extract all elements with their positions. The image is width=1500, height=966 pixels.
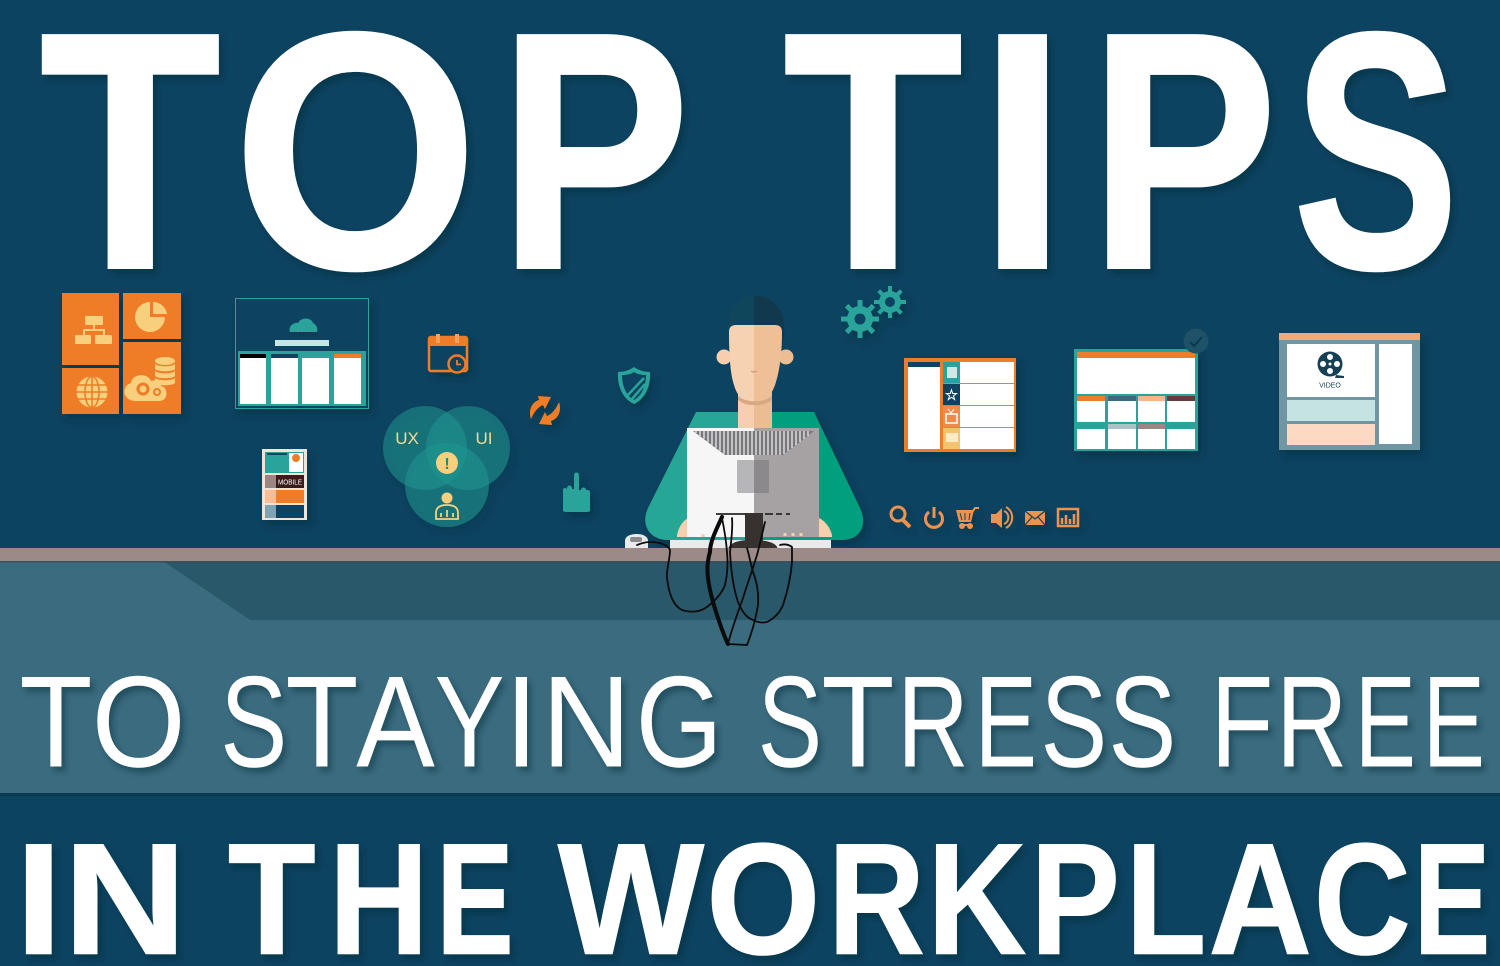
icon: refresh arrows	[530, 396, 560, 425]
venn diagram: !	[444, 456, 450, 473]
monitor back	[687, 428, 819, 537]
subtitle: to staying stress free: T	[821, 648, 894, 794]
panel: search page wireframe	[236, 298, 368, 408]
venn diagram: UX	[395, 429, 419, 448]
subtitle: to staying stress free: T	[285, 648, 358, 794]
subtitle: to staying stress free: A	[356, 648, 435, 794]
shirt	[645, 412, 863, 540]
subtitle: to staying stress free: G	[636, 648, 722, 794]
subtitle: to staying stress free: S	[220, 648, 287, 794]
lower band	[0, 561, 1500, 796]
panel: video page wireframe	[1279, 333, 1420, 450]
neck	[738, 385, 772, 429]
subtitle: to staying stress free: F	[1211, 648, 1273, 794]
hands	[677, 518, 832, 537]
icon: calendar	[429, 334, 467, 372]
keyboard	[670, 540, 831, 549]
stand	[716, 513, 790, 549]
subtitle: to staying stress free: S	[1108, 648, 1176, 794]
icon tile panel	[62, 293, 181, 414]
face	[729, 325, 782, 405]
panel: video page wireframe: VIDEO	[1319, 382, 1341, 390]
icon: shield	[618, 367, 650, 404]
ears	[716, 350, 794, 364]
subtitle: to staying stress free: E	[975, 648, 1037, 794]
panel: media list wireframe	[904, 358, 1016, 452]
subtitle: to staying stress free: R	[1276, 648, 1347, 794]
subtitle: to staying stress free: S	[1040, 648, 1107, 794]
monitor cables	[637, 517, 792, 645]
icon: check badge	[1184, 328, 1208, 354]
subtitle: to staying stress free: S	[758, 648, 822, 794]
hair	[728, 296, 784, 345]
shelf	[0, 548, 1500, 561]
person at computer	[625, 296, 863, 549]
venn diagram: UI	[476, 429, 492, 448]
subtitle: to staying stress free: O	[92, 648, 186, 794]
subtitle: to staying stress free: E	[1355, 648, 1416, 794]
panel: media list wireframe: ☆	[945, 387, 959, 404]
icon: pointing hand	[563, 472, 590, 512]
icon: gears	[841, 286, 906, 338]
panel: grid wireframe	[1074, 349, 1198, 451]
subtitle: to staying stress free: R	[897, 648, 969, 794]
panel: search page wireframe: SEARCH	[289, 332, 317, 338]
fingers	[703, 533, 801, 537]
subtitle: to staying stress free: I	[505, 648, 538, 794]
icon row: search power cart sound mail chart	[891, 507, 1078, 528]
icon: mobile layout	[262, 449, 307, 520]
mouse	[625, 534, 648, 549]
icon: mobile layout: MOBILE	[278, 478, 302, 486]
subtitle: to staying stress free: T	[19, 648, 92, 794]
subtitle: to staying stress free: N	[542, 648, 631, 794]
venn diagram	[383, 406, 510, 527]
subtitle: to staying stress free: Y	[434, 648, 505, 794]
